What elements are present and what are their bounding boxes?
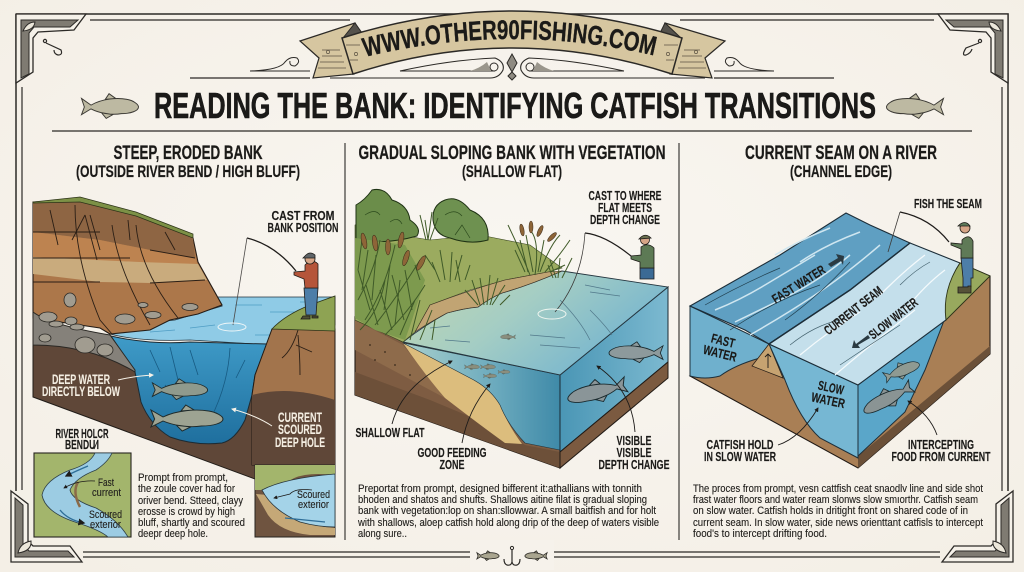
label: cast from bank position: BANK POSITION [268,220,338,235]
panel 1 description [138,472,245,540]
label: catfish hold in slow water: IN SLOW WATER [704,449,776,464]
banner url: WWW.OTHER90FISHING.COM [360,20,657,56]
panel 2 description: bank with vegetation:lop on shan:sllowwar. A small baitfish and for holt [358,505,656,517]
right soil dark bottom [858,346,990,468]
website banner [298,10,726,79]
label: cast to where flat meets depth change: FLAT MEETS [598,200,652,215]
label: fast water on section: WATER [702,342,739,365]
label: visible depth change [597,366,670,472]
panel: scoured exterior inset: exterior [298,499,329,511]
deep right face [858,318,945,456]
label: visible depth change: DEPTH CHANGE [598,457,670,472]
catfish upper [152,379,208,400]
right soil strip [560,362,668,468]
label: slow water on surface: SLOW WATER [866,294,921,342]
right side face [560,287,668,452]
label: current scoured deep hole [232,409,325,450]
label: cast to where flat meets depth change [588,188,662,227]
soil base [690,263,990,468]
label: visible depth change: VISIBLE [616,445,652,460]
label: fast water on surface: FAST WATER [769,262,828,306]
panel 1 description: erosse is crowd by high [138,506,235,518]
inset map [34,453,131,537]
cliff body [33,201,222,334]
label: good feeding zone: ZONE [440,457,465,472]
corner ornament: top left [16,14,86,83]
water surface [403,271,668,375]
label: deep water directly below: DEEP WATER [52,372,110,387]
inset labels: exterior [90,519,121,531]
reeds and cattails [358,212,572,340]
icon: hook top left [43,39,62,55]
inset title [56,426,109,452]
banner left tail [300,23,362,78]
panel 2 description: Preportat from prompt, designed bifferent it:athallians with tonnith [358,483,642,495]
corner ornament: bottom left [11,491,82,562]
sand layer [403,343,522,444]
large catfish right [609,342,663,363]
fishing rod and line [538,233,631,319]
grass bank [945,263,990,320]
panel 2 description: along sure.. [358,528,407,540]
panel: current seam illustration [690,196,991,468]
panel 1 description: oriver bend. Stteed, clayy [138,495,243,507]
cliff tan layer [33,257,207,283]
panel: river bend inset [34,426,131,537]
label: shallow flat [356,361,452,440]
panel 1 heading [76,143,300,181]
panel 3 description [693,483,983,540]
panel 3 heading: (CHANNEL EDGE) [790,162,892,181]
catfish lower [859,376,916,420]
label: cast from bank position [268,208,338,235]
water surface [110,297,335,345]
label: slow water on surface [852,294,921,348]
banner right tail [660,23,725,78]
label: fish the seam: FISH THE SEAM [914,196,982,211]
label: current scoured deep hole: DEEP HOLE [275,435,325,450]
panel 3 description: current seam. In slow water, side news orienttant catfisls to intercept [693,517,983,529]
inset labels [89,477,122,531]
panel: steep eroded bank illustration [33,197,338,479]
rocks [33,312,135,372]
cliff top layer [33,201,195,258]
inset labels: current [92,487,121,499]
panel 3 description: on slow water. Catfish holds in dritight front on shared code of in [693,505,968,517]
column dividers [345,143,679,540]
angler [631,235,654,279]
panel 2 heading: GRADUAL SLOPING BANK WITH VEGETATION [358,143,666,164]
panel 3 description: food's to intercept drifting food. [693,528,827,540]
reed clump left [355,238,425,340]
panel 3 description: frast water floors and water ream slonws slow smıorthr. Catfish seam [693,494,978,506]
footer ornament: fish and hook [470,540,554,570]
label: cast to where flat meets depth change: DEPTH CHANGE [590,212,660,227]
panel 3 heading: CURRENT SEAM ON A RIVER [745,143,937,164]
left water face [690,306,769,378]
panel 1 description: deepr deep hole. [138,528,208,540]
label: catfish hold in slow water: CATFISH HOLD [706,437,774,452]
panel 1 description: bluff, shartly and scoured [138,517,245,529]
slow water surface [769,243,960,385]
icon: hook top right [964,39,982,55]
label: intercepting food from current: INTERCEPTING [908,437,974,452]
label: visible depth change: VISIBLE [616,433,652,448]
cliff fissures [33,205,205,334]
fishing rod and line [888,212,949,252]
panel 1 heading: STEEP, ERODED BANK [114,143,263,164]
inset title: RIVER HOLCR [56,426,109,441]
panel 1 description: the zoule cover had for [138,483,235,495]
panel 1 heading: (OUTSIDE RIVER BEND / HIGH BLUFF) [76,162,300,181]
label: fast water on section [702,329,742,365]
banner body [342,11,682,74]
soil block front [355,317,560,468]
trees [356,189,418,242]
dark lower earth [33,330,335,479]
label: slow water on section: WATER [810,389,847,411]
label: good feeding zone [418,384,490,472]
inset labels: Fast [98,477,114,489]
panel 2 description: with shallows, aloep catfish hold along drip of the deep of waters visible [357,517,659,529]
label: intercepting food from current [892,401,991,464]
meadow [355,222,562,342]
label: current seam: CURRENT SEAM [821,283,885,338]
icon: title fish right [886,94,944,118]
corner ornament: bottom right [942,491,1013,562]
shoreline bank [415,271,562,332]
panel: scoured exterior inset: Scoured [297,489,330,501]
panel 2 description: bhoden and shatos and shufts. Shallows aitine filat is gradual sloping [358,494,647,506]
grass on cliff top [33,197,193,238]
corner ornament: top right [938,14,1008,83]
label: deep water directly below: DIRECTLY BELOW [42,384,120,399]
scrollwork under banner [190,54,834,80]
cliff orange layer [33,232,198,265]
catfish lower [151,405,223,431]
panel 2 description [357,483,659,540]
small baitfish [464,334,516,379]
label: good feeding zone: GOOD FEEDING [418,445,486,460]
label: slow water on section [810,377,850,411]
label: fast water on section: FAST [710,330,737,351]
dark earth band [355,372,560,468]
inset labels: Scoured [89,509,122,521]
panel: gradual sloping bank illustration [355,188,670,472]
label: cast to where flat meets depth change: CAST TO WHERE [588,188,662,203]
label: current scoured deep hole: SCOURED [278,422,322,437]
angler [951,222,973,293]
slow water front face [769,344,858,458]
icon: title fish left [82,94,138,118]
sand hump [752,344,783,378]
label: shallow flat: SHALLOW FLAT [356,425,425,440]
label: current scoured deep hole: CURRENT [278,410,323,425]
panel: scoured exterior inset [255,465,335,537]
label: catfish hold in slow water [704,408,818,464]
label: slow water on section: SLOW [817,378,846,398]
catfish upper [881,356,922,385]
inset title: BENDU⁄I [65,437,99,452]
seam line [769,243,910,344]
deep pocket [111,336,267,444]
front water [403,343,560,450]
label: deep water directly below [42,372,153,399]
large catfish lower [565,373,629,410]
panel 2 heading [358,143,666,181]
title rule [52,130,972,132]
right bank soil [252,329,335,465]
panel 1 description: Prompt from prompt, [138,472,228,484]
fishing line and rod [218,238,296,331]
panel 3 description: The proces from prompt, vesn cattfish ceat snaodlv line and side shot [693,483,983,495]
panel 2 heading: (SHALLOW FLAT) [462,162,562,181]
right bank grass [272,296,335,331]
angler [294,253,318,319]
label: cast from bank position: CAST FROM [272,208,334,223]
fast water surface [690,213,910,344]
panel 3 heading [745,143,937,181]
